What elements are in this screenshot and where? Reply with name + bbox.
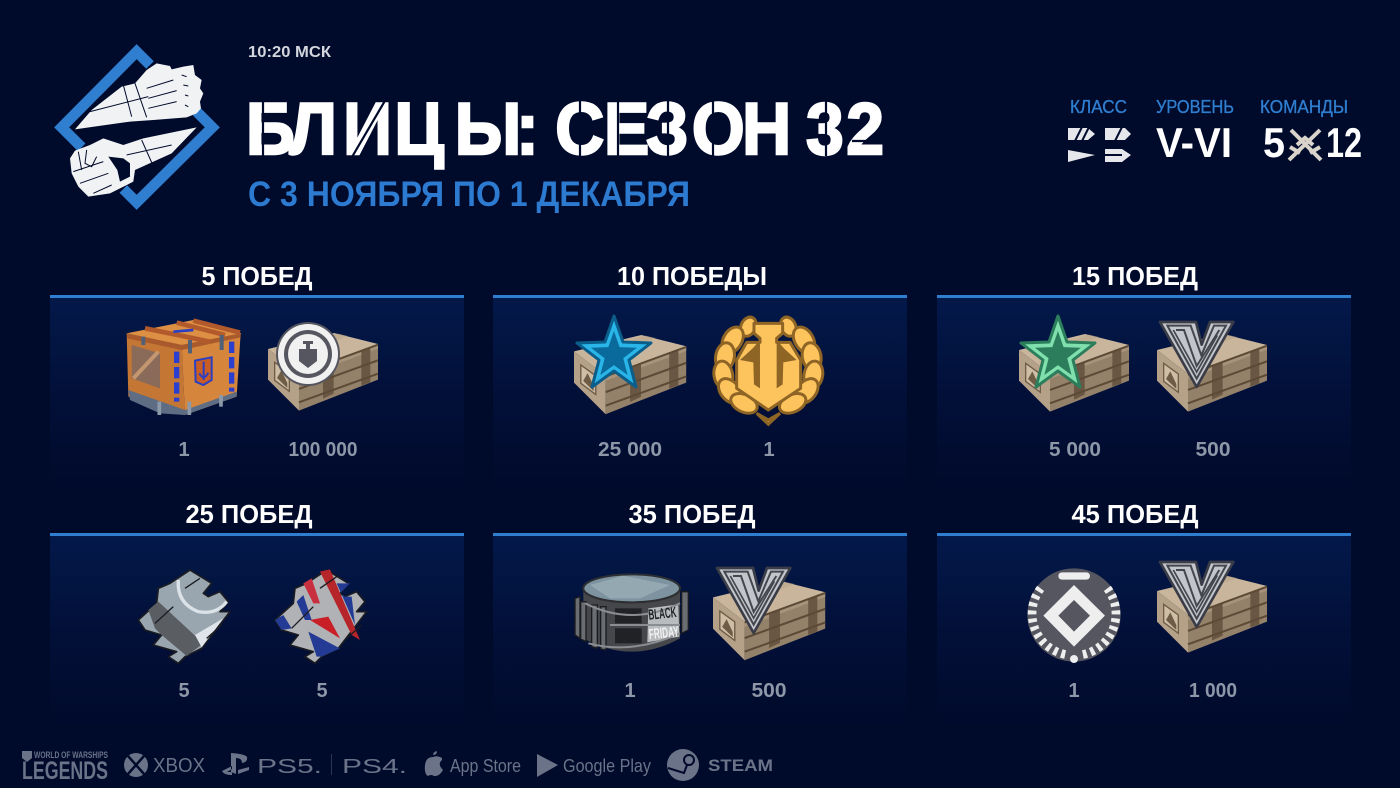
footer: platform logos	[22, 749, 773, 785]
panel: 15 wins: 500	[1196, 439, 1230, 461]
panel: 45 wins: 1	[1068, 680, 1080, 702]
panel: 5 wins: 100 000	[288, 439, 358, 461]
icon: orange container	[127, 320, 242, 415]
panel: 15 wins: 15 ПОБЕД	[1072, 261, 1198, 291]
panel: 5 wins: 5 ПОБЕД	[202, 261, 313, 291]
logo: App Store: App Store	[450, 756, 521, 776]
label on drum: BLACK	[648, 605, 678, 624]
panel: 35 wins: 500	[752, 680, 786, 702]
icon: grey token	[138, 570, 230, 663]
icon: crossed swords	[1289, 130, 1321, 160]
battle info: teams: 5	[1263, 119, 1285, 166]
logo: Google Play	[537, 754, 651, 777]
panel: 25 wins: 5	[316, 680, 328, 702]
panel: 35 wins: 1	[624, 680, 636, 702]
logo: PlayStation: PS5.	[257, 756, 322, 778]
logo: Steam: STEAM	[708, 756, 773, 775]
logo: Legends	[22, 750, 108, 785]
time label: 10:20 МСК	[248, 44, 331, 61]
icon: green star	[1021, 316, 1095, 387]
label on drum	[646, 605, 680, 643]
icon: credits coin	[276, 322, 340, 386]
logo: Xbox	[124, 753, 205, 777]
logo: Google Play: Google Play	[563, 756, 651, 776]
panel: 45 wins	[937, 499, 1351, 726]
icon: British flag token	[275, 569, 367, 663]
logo: crossed gauntlets in a diamond	[62, 52, 212, 202]
panel: 15 wins: 5 000	[1049, 439, 1101, 461]
panel: 10 wins: 10 ПОБЕДЫ	[617, 261, 767, 291]
panel: 35 wins	[493, 499, 907, 726]
logo: Legends: WORLD OF WARSHIPS	[34, 750, 108, 760]
panel: 5 wins	[50, 261, 464, 490]
battle info: class: КЛАСС	[1070, 97, 1127, 117]
battle info: class	[1068, 97, 1131, 162]
panel: 25 wins	[50, 499, 464, 726]
title: БЛИЦЫ:СЕЗОН32	[246, 88, 884, 170]
subtitle dates: С 3 НОЯБРЯ ПО 1 ДЕКАБРЯ	[248, 175, 690, 214]
panel: 15 wins	[937, 261, 1351, 490]
icon: diamond emblem	[1027, 568, 1121, 663]
panel: 45 wins: 1 000	[1189, 680, 1237, 702]
panel: 10 wins: 1	[763, 439, 775, 461]
panel: 5 wins: 1	[178, 439, 190, 461]
icon: Black Friday drum	[575, 574, 688, 652]
panel: 35 wins: 35 ПОБЕД	[628, 499, 756, 529]
logo: App Store	[425, 751, 521, 776]
logo: Xbox: XBOX	[153, 755, 205, 777]
icon: blue star	[577, 316, 651, 387]
icon: gold laurel emblem	[712, 315, 825, 424]
battle info: tier	[1156, 97, 1234, 166]
panel: 10 wins	[493, 261, 907, 490]
logo: PlayStation: PS4.	[342, 756, 407, 778]
logo: Legends: LEGENDS	[22, 757, 108, 785]
battle info: tier: УРОВЕНЬ	[1156, 97, 1234, 117]
panel: 25 wins: 5	[178, 680, 190, 702]
logo: Steam	[667, 749, 773, 781]
icon: ship classes	[1068, 127, 1131, 162]
panel: 45 wins: 45 ПОБЕД	[1072, 499, 1199, 529]
panel: 10 wins: 25 000	[598, 439, 662, 461]
battle info: teams: 12	[1326, 119, 1362, 166]
label on drum: FRIDAY	[648, 624, 680, 643]
logo: PlayStation	[222, 753, 407, 778]
battle info: teams	[1260, 97, 1362, 166]
icon: V badge	[1160, 322, 1233, 387]
battle info: teams: КОМАНДЫ	[1260, 97, 1348, 117]
panel: 25 wins: 25 ПОБЕД	[186, 499, 313, 529]
battle info: tier: V-VI	[1156, 119, 1232, 166]
